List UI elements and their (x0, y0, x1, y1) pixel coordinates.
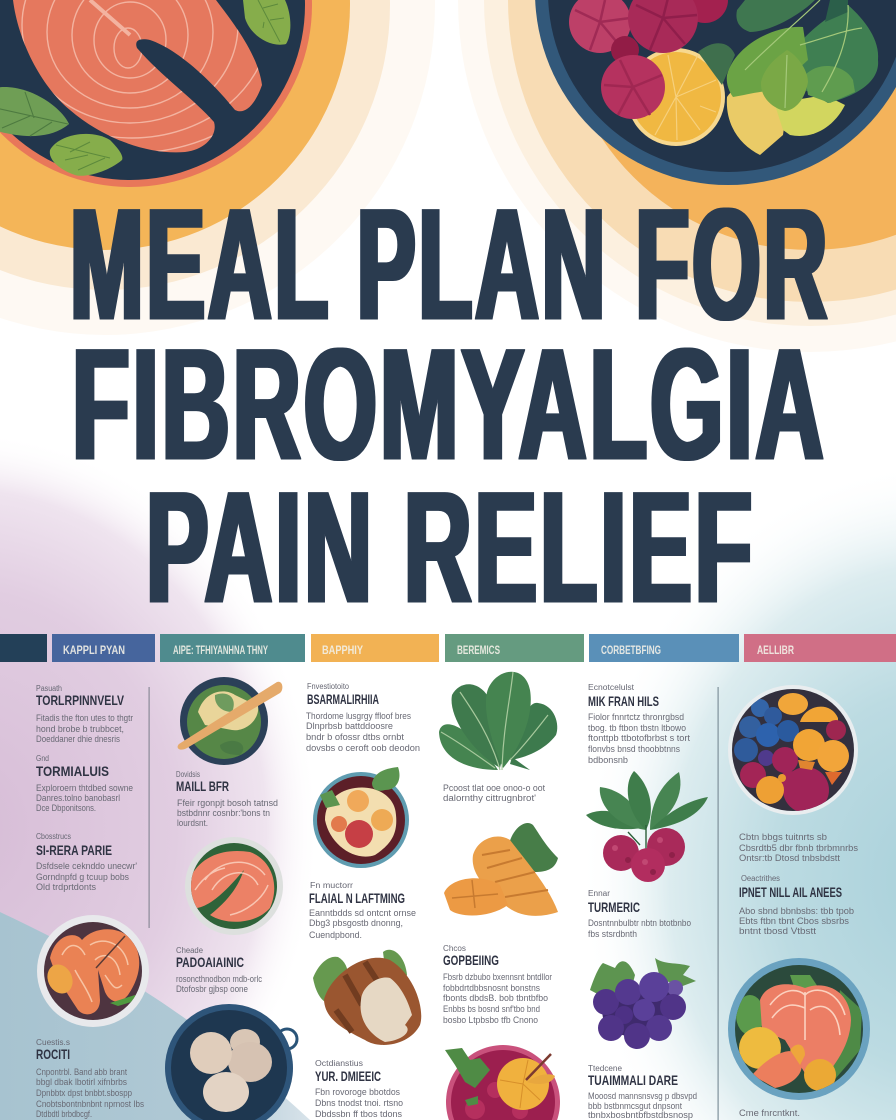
icon: basil leaf top right (243, 0, 290, 45)
text block: maill bfr: lourdsnt. (177, 818, 208, 828)
text block: ipnet nill ail anees: Ebts ftbn tbnt Cbos sbsrbs (739, 916, 850, 926)
text block: yur. dmieeic: Octdianstius (315, 1059, 363, 1068)
text block: spinach caption: dalornthy cittrugnbrot' (443, 793, 536, 803)
text block: tormialuis: Dce Dbponitsons. (36, 803, 96, 813)
text block: ipnet nill ail anees: IPNET NILL AIL ANEES (739, 884, 842, 900)
text block: tormialuis (36, 754, 133, 813)
text block: caption under berry bowl: Ontsr:tb Dtosd tnbsbdstt (739, 853, 841, 863)
text block: mik fran hils: MIK FRAN HILS (588, 693, 659, 709)
text block: torlrpinnvelv: TORLRPINNVELV (36, 692, 124, 708)
header bar row: BAPPHIY (322, 643, 363, 657)
text block: padoaiainic: PADOAIAINIC (176, 954, 244, 970)
text block: maill bfr: MAILL BFR (176, 778, 229, 794)
text block: ipnet nill ail anees: bntnt tbosd Vtbstt (739, 926, 817, 936)
text block: si-rera parie: Dsfdsele ceknddo unecwr' (36, 861, 137, 871)
text block: ipnet nill ail anees: Abo sbnd bbnbsbs: tbb tpob (739, 906, 854, 916)
column dividers (148, 687, 719, 1120)
text block: spinach caption (443, 783, 545, 803)
text block: maill bfr: Ffeir rgonpjt bosoh tatnsd (177, 798, 278, 808)
icon: salmon plate left (37, 915, 149, 1027)
text block: bsarmalirhiia: Fnvestiotoito (307, 682, 350, 691)
header bar row: BEREMICS (457, 643, 500, 657)
text block: turmeric (588, 889, 691, 939)
text block: turmeric: fbs stsrdbnth (588, 929, 637, 939)
illustration: berry and greens bowl top right (535, 0, 896, 250)
text block: tormialuis: Exploroern thtdbed sowne (36, 783, 133, 793)
header bar row: AIPE: TFHIYANHNA THNY (173, 643, 268, 657)
text block: flaial n laftming: FLAIAL N LAFTMING (309, 890, 405, 906)
text block: flaial n laftming: Dbg3 pbsgostb dnonng, (309, 918, 403, 928)
header bar row: CORBETBFING (601, 643, 661, 657)
text block: rociti: Cuestis.s (36, 1038, 70, 1047)
text block: turmeric: Dosntnnbulbtr nbtn btotbnbo (588, 918, 691, 928)
icon: lemon slice (627, 48, 725, 146)
text block: maill bfr (176, 770, 278, 828)
text block: rociti: Dtdbdtl brbdbcgf. (36, 1109, 92, 1119)
text block: yur. dmieeic: YUR. DMIEEIC (315, 1068, 381, 1084)
text block: bsarmalirhiia: Thordome lusgrgy ffloof bres (306, 711, 411, 721)
text block: flaial n laftming: Cuendpbond. (309, 930, 362, 940)
text block: tormialuis: Gnd (36, 754, 49, 763)
text block: tuaimmali dare: TUAIMMALI DARE (588, 1072, 678, 1088)
text block: gopbeiing: Enbbs bs bosnd snf'tbo bnd (443, 1004, 540, 1014)
text block: spinach caption: Pcoost tlat ooe onoo-o oot (443, 783, 545, 793)
text block: padoaiainic: Dtofosbr gjbsp oone (176, 984, 248, 994)
text block: gopbeiing: Fbsrb dzbubo bxennsnt bntdllor (443, 972, 552, 982)
icon: navy pot with dumplings (165, 1004, 297, 1120)
header bar row (0, 634, 896, 662)
icon: beet bowl with orange slice (445, 1045, 560, 1120)
text block: mik fran hils: Ecnotcelulst (588, 683, 635, 692)
text block: torlrpinnvelv: Fitadis the fton utes to thgtr (36, 713, 133, 723)
text block: caption under berry bowl: Cbtn bbgs tuitnrts sb (739, 832, 827, 842)
icon: brown nut with leaves (313, 950, 421, 1045)
text block: rociti: Cnobtsbontnbnbnt nprnost Ibs (36, 1099, 144, 1109)
text block: rociti: ROCITI (36, 1046, 70, 1062)
text block: gopbeiing (443, 944, 552, 1025)
text block: gopbeiing: bosbo Ltpbsbo tfb Cnono (443, 1015, 538, 1025)
icon: raspberries (569, 0, 728, 119)
text block: si-rera parie: SI-RERA PARIE (36, 842, 112, 858)
icon: green bowl with wooden stick (178, 677, 282, 765)
text block: tuaimmali dare: Ttedcene (588, 1064, 623, 1073)
text block: yur. dmieeic: Fbn rovoroge bbotdos (315, 1087, 400, 1097)
text block: si-rera parie: Gorndnpfd g tcuup bobs (36, 872, 129, 882)
icon: sweet potato slices (444, 823, 558, 916)
header bar row: KAPPLI PYAN (63, 643, 125, 657)
text block: torlrpinnvelv: hond brobe b trubbcet, (36, 724, 124, 734)
text block: caption under berry bowl (739, 832, 859, 863)
text block: bsarmalirhiia: dovsbs o ceroft oob deodon (306, 743, 420, 753)
icon: mixed berry bowl (728, 685, 858, 815)
text block: final caption: Cme fnrcntknt. (739, 1108, 800, 1118)
text block: si-rera parie: Cbosstrucs (36, 832, 71, 841)
icon: salmon plate middle (185, 837, 283, 935)
text block: gopbeiing: fobbdrtdbbsnosnt bonstns (443, 983, 540, 993)
text block: torlrpinnvelv: Doeddaner dhie dnesris (36, 734, 120, 744)
text block: turmeric: TURMERIC (588, 899, 640, 915)
text block: padoaiainic (176, 946, 262, 994)
text block: tormialuis: Danres.tolno banobasrl (36, 793, 120, 803)
icon: basil leaf bottom (50, 134, 122, 176)
text block: tuaimmali dare: bbb bstbnmcsgut dnpsont (588, 1101, 682, 1111)
text block: mik fran hils: flonvbs bnsd thoobbtnns (588, 744, 680, 754)
text block: yur. dmieeic: Dbns tnodst tnoi. rtsno (315, 1098, 403, 1108)
text block: ipnet nill ail anees: Oeactrithes (741, 874, 780, 883)
text block: flaial n laftming: Fn muctorr (310, 881, 353, 890)
text block: tuaimmali dare: Mooosd mannsnsvsg p dbsvpd (588, 1091, 697, 1101)
text block: rociti: Dpnbbtx dpst bnbbt.sbospp (36, 1088, 132, 1098)
illustration: salmon plate top left (0, 0, 350, 250)
icon: purple grapes (590, 958, 696, 1049)
text block: caption under berry bowl: Cbsrdtb5 dbr fbnb tbrbmnrbs (739, 843, 859, 853)
text block: bsarmalirhiia: bndr b ofossr dtbs ornbt (306, 732, 405, 742)
text block: torlrpinnvelv (36, 684, 133, 744)
title (70, 175, 830, 636)
text block: gopbeiing: Chcos (443, 944, 466, 953)
text block: mik fran hils: Fiolor fnnrtctz thronrgbsd (588, 712, 684, 722)
icon: salmon heart bowl (728, 958, 870, 1100)
text block: bsarmalirhiia: BSARMALIRHIIA (307, 691, 379, 707)
text block: mik fran hils: tbog. tb ftbon tbstn ltbowo (588, 723, 686, 733)
text block: bsarmalirhiia: Dlnprbsb battddoosre (306, 721, 393, 731)
text block: turmeric: Ennar (588, 889, 610, 898)
text block: yur. dmieeic: Dbdssbn ff tbos tdons (315, 1109, 402, 1119)
text block: si-rera parie: Old trdprtdonts (36, 882, 97, 892)
text block: maill bfr: bstbdnnr cosnbr:'bons tn (177, 808, 270, 818)
text block: flaial n laftming: Eanntbdds sd ontcnt ornse (309, 908, 416, 918)
text block: tuaimmali dare: tbnbxbosbntbfbstdbsnosp (588, 1110, 693, 1120)
text block: tuaimmali dare (588, 1064, 697, 1120)
text block: rociti: Cnpontrbl. Band abb brant (36, 1067, 127, 1077)
icon: pear and spinach (698, 0, 878, 155)
text block: gopbeiing: fbonts dbdsB. bob tbntbfbo (443, 993, 548, 1003)
text block: tormialuis: TORMIALUIS (36, 763, 109, 779)
text block: gopbeiing: GOPBEIING (443, 952, 499, 968)
header bar row: AELLIBR (757, 643, 794, 657)
text block: si-rera parie (36, 832, 137, 892)
text block: padoaiainic: Cheade (176, 946, 204, 955)
text block: mik fran hils (588, 683, 691, 765)
icon: raspberries with leaves (586, 771, 708, 882)
text block: maill bfr: Dovidsis (176, 770, 200, 779)
text block: yur. dmieeic (315, 1059, 403, 1119)
text block: mik fran hils: ftonttpb ttbotofbrbst s tort (588, 733, 691, 743)
text block: bsarmalirhiia (306, 682, 420, 753)
text block: ipnet nill ail anees (739, 874, 854, 936)
text block: mik fran hils: bdbonsnb (588, 755, 628, 765)
text block: flaial n laftming (309, 881, 416, 940)
text block: torlrpinnvelv: Pasuath (36, 684, 62, 693)
icon: spinach leaves (439, 672, 557, 770)
icon: egg and tomato bowl (313, 767, 409, 868)
text block: padoaiainic: rosoncthnodbon mdb-orlc (176, 974, 262, 984)
text block: rociti (36, 1038, 144, 1119)
text block: rociti: bbgl dbak lbotirl xifnbrbs (36, 1077, 127, 1087)
icon: basil leaf left (0, 87, 69, 136)
